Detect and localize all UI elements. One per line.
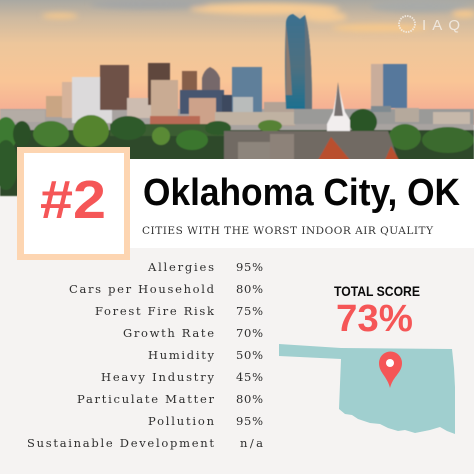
- metrics list: 80%: [236, 282, 263, 296]
- metrics list: Allergies: [147, 260, 214, 274]
- metrics list: Pollution: [148, 414, 215, 428]
- metrics list: Sustainable Development: [27, 436, 214, 450]
- metrics list: 45%: [236, 370, 263, 384]
- metrics list: 80%: [236, 392, 263, 406]
- metrics list: 95%: [236, 414, 263, 428]
- house roof: [224, 131, 399, 160]
- metrics list: 50%: [236, 348, 263, 362]
- map: Oklahoma: [279, 344, 455, 434]
- metrics list: Cars per Household: [69, 282, 215, 296]
- white title band: [130, 159, 474, 248]
- trees: [0, 109, 474, 196]
- metrics list: [27, 260, 263, 450]
- metrics list: Particulate Matter: [77, 392, 214, 406]
- city skyline photo: [0, 0, 474, 196]
- rank badge: #2: [40, 170, 106, 230]
- metrics list: Humidity: [148, 348, 214, 362]
- metrics list: n/a: [240, 436, 263, 450]
- metrics list: Forest Fire Risk: [95, 304, 215, 318]
- icon: map pin: [379, 352, 402, 388]
- metrics list: Growth Rate: [123, 326, 214, 340]
- total score label: TOTAL SCORE: [334, 283, 420, 299]
- rank badge: [17, 147, 130, 260]
- metrics list: 70%: [236, 326, 263, 340]
- logo: IAQ: [399, 16, 460, 34]
- church steeple: [327, 82, 350, 135]
- metrics list: 95%: [236, 260, 263, 274]
- logo: IAQ: IAQ: [422, 17, 460, 34]
- subtitle: CITIES WITH THE WORST INDOOR AIR QUALITY: [142, 225, 434, 237]
- metrics list: 75%: [236, 304, 263, 318]
- metrics list: Heavy Industry: [101, 370, 214, 384]
- total score value: 73%: [336, 298, 413, 340]
